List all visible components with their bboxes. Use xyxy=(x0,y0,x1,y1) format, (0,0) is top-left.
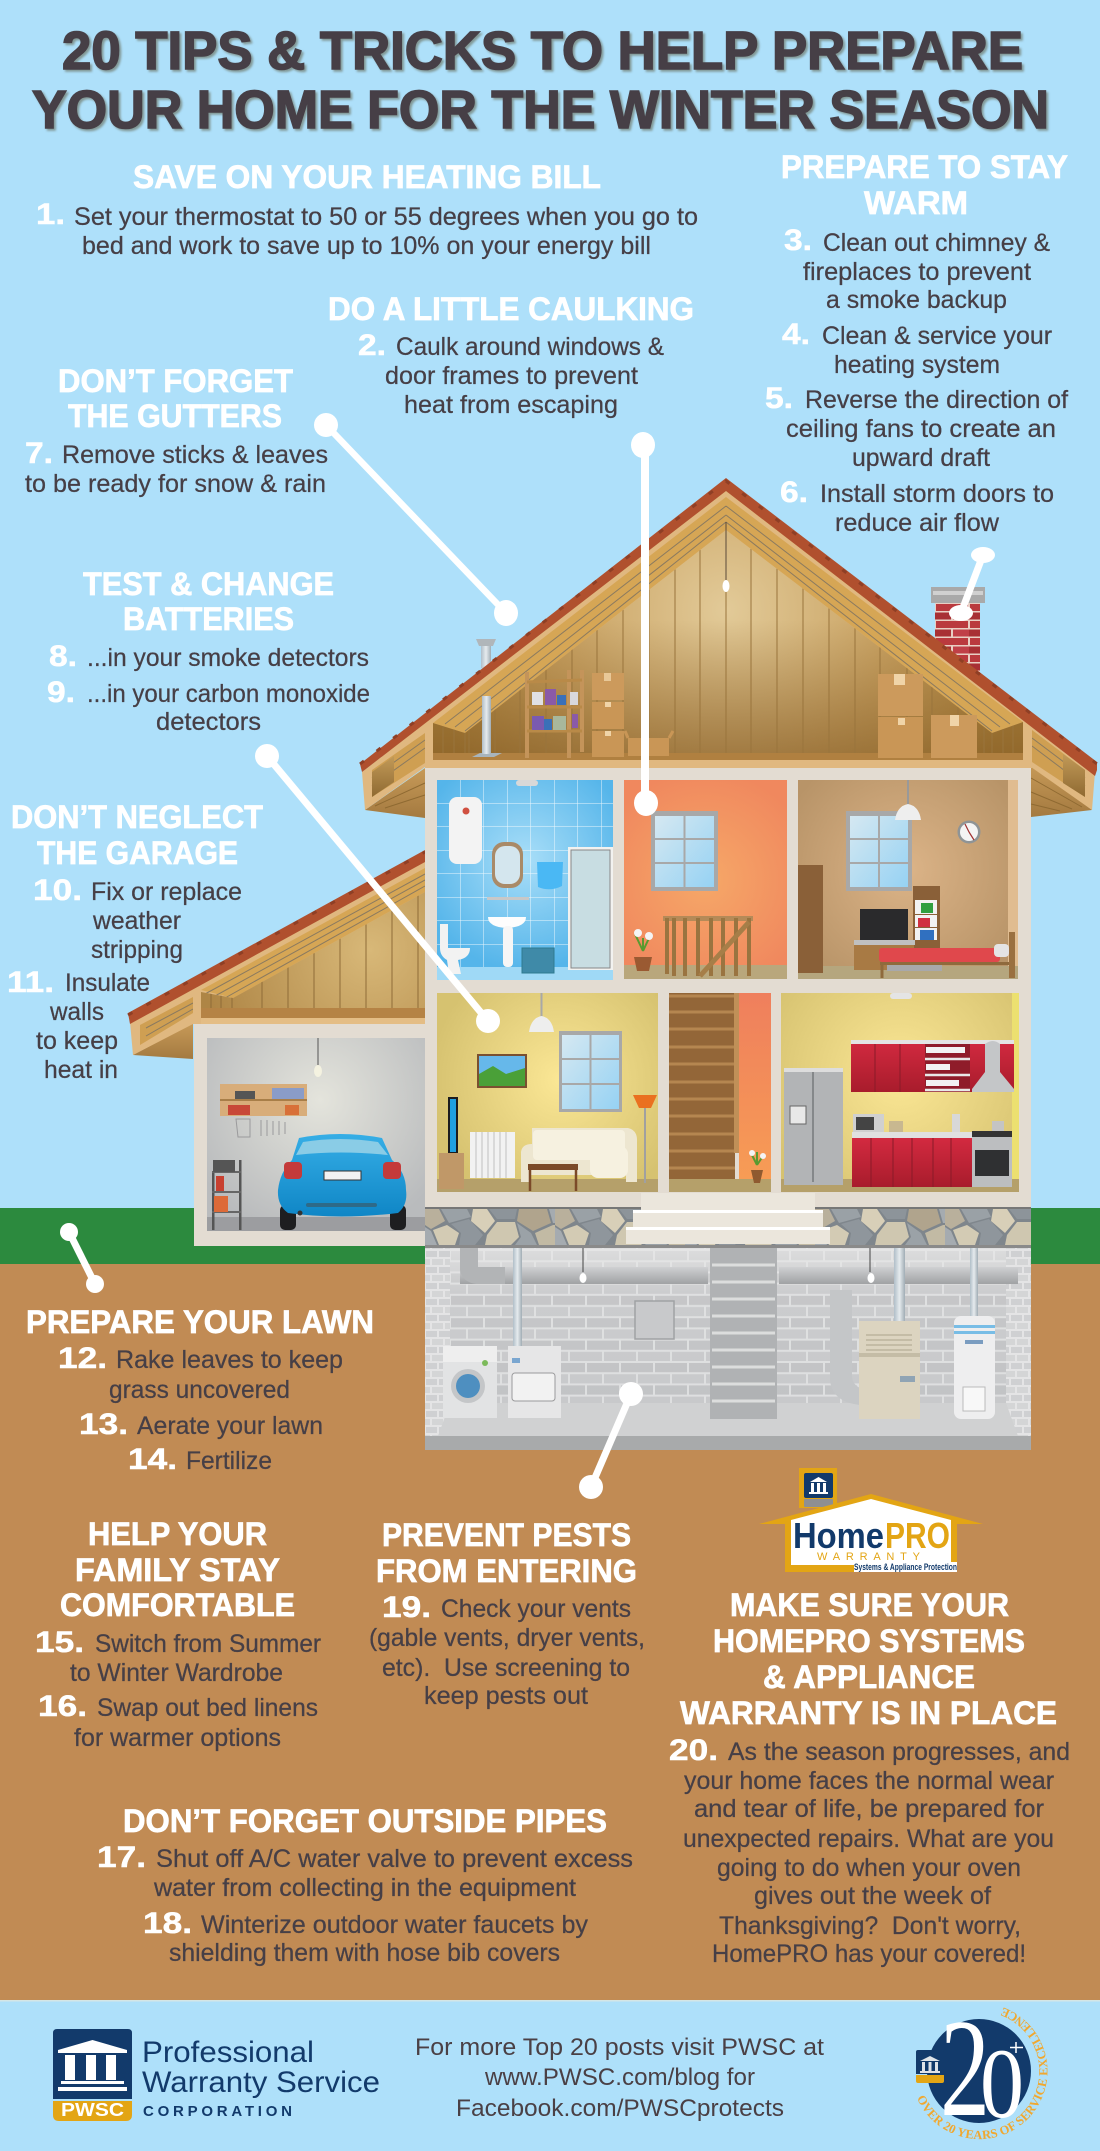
background: soil xyxy=(0,1264,1100,2000)
ducts xyxy=(460,1248,1018,1405)
section: don't forget the gutters: to be ready for snow & rain xyxy=(25,470,326,498)
pointer: lawn xyxy=(60,1223,104,1293)
section: do a little caulking xyxy=(328,291,694,419)
section: test and change batteries: BATTERIES xyxy=(123,601,294,637)
logo: HomePRO warranty xyxy=(759,1468,983,1572)
section: don't neglect the garage: to keep xyxy=(36,1027,118,1055)
section: prevent pests: PREVENT PESTS xyxy=(382,1517,631,1553)
basement xyxy=(425,1245,1031,1450)
section: do a little caulking: 2. xyxy=(358,329,386,362)
section: don't neglect the garage: THE GARAGE xyxy=(37,835,238,871)
title: YOUR HOME FOR THE WINTER SEASON xyxy=(32,80,1049,140)
section: homepro warranty: and tear of life, be prepared for xyxy=(694,1795,1044,1823)
section: save on your heating bill: Set your thermostat to 50 or 55 degrees when you go to xyxy=(74,203,698,231)
section: don't forget the gutters xyxy=(25,363,328,498)
section: prepare your lawn: Fertilize xyxy=(186,1447,272,1475)
title xyxy=(32,21,1049,140)
section: homepro warranty: going to do when your oven xyxy=(717,1854,1021,1882)
furnace xyxy=(859,1321,920,1419)
section: test and change batteries: TEST & CHANGE xyxy=(83,566,334,602)
pointer: caulking xyxy=(631,432,658,816)
title: 20 TIPS & TRICKS TO HELP PREPARE xyxy=(62,21,1023,81)
section: test and change batteries: ...in your carbon monoxide xyxy=(87,680,370,708)
section: don't neglect the garage: heat in xyxy=(44,1056,118,1084)
section: homepro warranty: 20. xyxy=(669,1734,718,1767)
section: prevent pests: Check your vents xyxy=(441,1595,631,1623)
section: outside pipes: 18. xyxy=(143,1907,192,1940)
section: prepare your lawn: 13. xyxy=(79,1408,128,1441)
section: prepare to stay warm: PREPARE TO STAY xyxy=(781,149,1068,185)
section: prepare to stay warm: 5. xyxy=(765,382,793,415)
section: prepare your lawn: 12. xyxy=(58,1342,107,1375)
footer text: For more Top 20 posts visit PWSC at xyxy=(415,2034,824,2061)
logo: PWSC: Warranty Service xyxy=(142,2066,380,2099)
badge: 20+ years: OVER 20 YEARS OF SERVICE EXCELLENCE xyxy=(918,2008,1048,2140)
section: don't neglect the garage: 10. xyxy=(33,874,82,907)
section: test and change batteries xyxy=(47,566,370,736)
section: prepare to stay warm: a smoke backup xyxy=(826,286,1007,314)
logo: HomePRO warranty: Systems & Appliance Protection xyxy=(854,1562,957,1572)
section: prepare your lawn: 14. xyxy=(128,1443,177,1476)
section: don't neglect the garage: 11. xyxy=(7,966,54,999)
section: save on your heating bill: bed and work to save up to 10% on your energy bill xyxy=(82,232,651,260)
section: homepro warranty xyxy=(669,1587,1070,1968)
garage roof xyxy=(128,850,425,1059)
section: prepare your lawn: Rake leaves to keep xyxy=(116,1346,343,1374)
pointer: chimney xyxy=(949,547,995,621)
section: help your family stay comfortable: 16. xyxy=(38,1690,87,1723)
section: prepare your lawn xyxy=(26,1304,374,1476)
main roof xyxy=(360,478,1097,818)
room: staircase xyxy=(669,993,771,1192)
section: help your family stay comfortable: 15. xyxy=(35,1626,84,1659)
section: do a little caulking: door frames to prevent xyxy=(385,362,638,390)
section: don't neglect the garage: DON’T NEGLECT xyxy=(11,799,263,835)
section: outside pipes: Winterize outdoor water faucets by xyxy=(201,1911,588,1939)
stone foundation xyxy=(425,1207,1031,1245)
section: prepare to stay warm: reduce air flow xyxy=(835,509,1000,537)
badge: 20+ years: 2 xyxy=(940,1991,990,2146)
garage walls xyxy=(194,1024,425,1246)
section: prepare to stay warm: ceiling fans to create an xyxy=(786,415,1056,443)
section: homepro warranty: Thanksgiving? Don't worry, xyxy=(719,1912,1021,1940)
logo: PWSC: PWSC xyxy=(61,2100,124,2120)
section: don't neglect the garage: walls xyxy=(49,998,104,1026)
front steps xyxy=(626,1193,830,1244)
pointer: gutters xyxy=(314,413,518,626)
water heater xyxy=(954,1316,995,1419)
basement stairs xyxy=(710,1248,777,1419)
section: test and change batteries: detectors xyxy=(156,708,261,736)
section: save on your heating bill: 1. xyxy=(36,198,65,231)
section: prevent pests: (gable vents, dryer vents, xyxy=(369,1624,645,1652)
section: don't neglect the garage: Insulate xyxy=(65,969,150,997)
section: homepro warranty: your home faces the normal wear xyxy=(684,1767,1054,1795)
section: help your family stay comfortable: Swap out bed linens xyxy=(97,1694,318,1722)
chimney xyxy=(931,587,985,681)
attic contents xyxy=(472,522,977,758)
section: don't neglect the garage xyxy=(7,799,263,1084)
section: help your family stay comfortable: FAMILY STAY xyxy=(75,1552,280,1588)
section: test and change batteries: 9. xyxy=(47,676,75,709)
illustration: house cutaway xyxy=(128,478,1097,1450)
electrical panel xyxy=(635,1301,674,1339)
section: prepare to stay warm: fireplaces to prevent xyxy=(803,258,1031,286)
section: prevent pests: 19. xyxy=(382,1591,431,1624)
section: homepro warranty: HomePRO has your covered! xyxy=(712,1940,1026,1968)
section: homepro warranty: HOMEPRO SYSTEMS xyxy=(713,1623,1025,1659)
logo: PWSC xyxy=(53,2029,380,2121)
section: homepro warranty: gives out the week of xyxy=(754,1882,991,1910)
section: do a little caulking: heat from escaping xyxy=(404,391,618,419)
logo: PWSC: CORPORATION xyxy=(143,2103,292,2120)
room: bedroom xyxy=(798,780,1018,979)
section: prepare to stay warm: 3. xyxy=(784,224,812,257)
footer text: Facebook.com/PWSCprotects xyxy=(456,2095,784,2122)
washer xyxy=(443,1346,497,1418)
section: prepare to stay warm: heating system xyxy=(834,351,1000,379)
section: homepro warranty: WARRANTY IS IN PLACE xyxy=(680,1695,1057,1731)
background: grass xyxy=(0,1208,1100,1264)
section: help your family stay comfortable xyxy=(35,1516,321,1752)
section: outside pipes: shielding them with hose bib covers xyxy=(169,1939,560,1967)
house walls xyxy=(425,768,1031,1208)
section: don't forget the gutters: Remove sticks & leaves xyxy=(62,441,328,469)
section: prevent pests: keep pests out xyxy=(424,1682,588,1710)
section: save on your heating bill xyxy=(36,159,698,260)
car xyxy=(278,1134,406,1230)
background: sky xyxy=(0,0,1100,1208)
section: prepare to stay warm: Reverse the direction of xyxy=(805,386,1068,414)
section: help your family stay comfortable: to Winter Wardrobe xyxy=(70,1659,283,1687)
section: don't neglect the garage: stripping xyxy=(91,936,183,964)
section: don't forget the gutters: 7. xyxy=(25,437,53,470)
section: prepare to stay warm: Install storm doors to xyxy=(820,480,1054,508)
section: help your family stay comfortable: HELP YOUR xyxy=(88,1516,267,1552)
section: don't forget the gutters: DON’T FORGET xyxy=(58,363,293,399)
section: homepro warranty: & APPLIANCE xyxy=(763,1659,975,1695)
dryer xyxy=(508,1346,561,1418)
section: prevent pests: FROM ENTERING xyxy=(376,1553,637,1589)
badge: 20+ years: 0 xyxy=(980,2028,1024,2139)
logo: HomePRO warranty: PRO xyxy=(885,1515,950,1556)
section: prepare to stay warm xyxy=(765,149,1068,537)
room: bathroom xyxy=(437,780,613,980)
pointer: batteries xyxy=(255,744,500,1033)
section: outside pipes: 17. xyxy=(97,1841,146,1874)
room: garage xyxy=(207,1038,425,1231)
section: outside pipes: Shut off A/C water valve to prevent excess xyxy=(156,1845,633,1873)
room: living room xyxy=(437,993,658,1192)
footer band xyxy=(0,2000,1100,2151)
footer text xyxy=(415,2034,824,2122)
section: test and change batteries: ...in your smoke detectors xyxy=(87,644,369,672)
section: prepare to stay warm: Clean out chimney & xyxy=(823,229,1050,257)
section: help your family stay comfortable: for warmer options xyxy=(74,1724,281,1752)
logo: HomePRO warranty: WARRANTY xyxy=(817,1551,921,1563)
roof vent pipe xyxy=(476,639,496,757)
section: do a little caulking: DO A LITTLE CAULKING xyxy=(328,291,694,327)
room: orange landing xyxy=(624,780,787,979)
section: homepro warranty: unexpected repairs. What are you xyxy=(683,1825,1054,1853)
section: prepare to stay warm: 4. xyxy=(782,318,810,351)
section: prepare to stay warm: Clean & service your xyxy=(822,322,1052,350)
section: prepare your lawn: PREPARE YOUR LAWN xyxy=(26,1304,374,1340)
section: don't forget the gutters: THE GUTTERS xyxy=(68,398,282,434)
section: prepare your lawn: Aerate your lawn xyxy=(137,1412,323,1440)
logo: PWSC: Professional xyxy=(142,2036,314,2069)
section: help your family stay comfortable: COMFORTABLE xyxy=(60,1587,295,1623)
section: help your family stay comfortable: Switch from Summer xyxy=(95,1630,321,1658)
section: prevent pests xyxy=(369,1517,645,1710)
section: outside pipes: water from collecting in the equipment xyxy=(153,1874,576,1902)
section: prepare to stay warm: 6. xyxy=(780,476,808,509)
section: prevent pests: etc). Use screening to xyxy=(382,1654,630,1682)
logo: HomePRO warranty: Home xyxy=(793,1515,884,1556)
section: prepare to stay warm: upward draft xyxy=(852,444,990,472)
section: don't neglect the garage: Fix or replace xyxy=(91,878,242,906)
section: homepro warranty: As the season progresses, and xyxy=(728,1738,1070,1766)
pointer: pests xyxy=(579,1382,643,1499)
section: prepare your lawn: grass uncovered xyxy=(109,1376,290,1404)
section: outside pipes: DON’T FORGET OUTSIDE PIPES xyxy=(123,1803,607,1839)
room: kitchen xyxy=(781,993,1019,1192)
section: outside pipes xyxy=(97,1803,633,1967)
section: don't neglect the garage: weather xyxy=(92,907,181,935)
section: homepro warranty: MAKE SURE YOUR xyxy=(730,1587,1009,1623)
section: do a little caulking: Caulk around windows & xyxy=(396,333,664,361)
section: prepare to stay warm: WARM xyxy=(864,185,968,221)
section: save on your heating bill: SAVE ON YOUR HEATING BILL xyxy=(133,159,601,195)
footer text: www.PWSC.com/blog for xyxy=(484,2064,755,2091)
section: test and change batteries: 8. xyxy=(49,640,77,673)
